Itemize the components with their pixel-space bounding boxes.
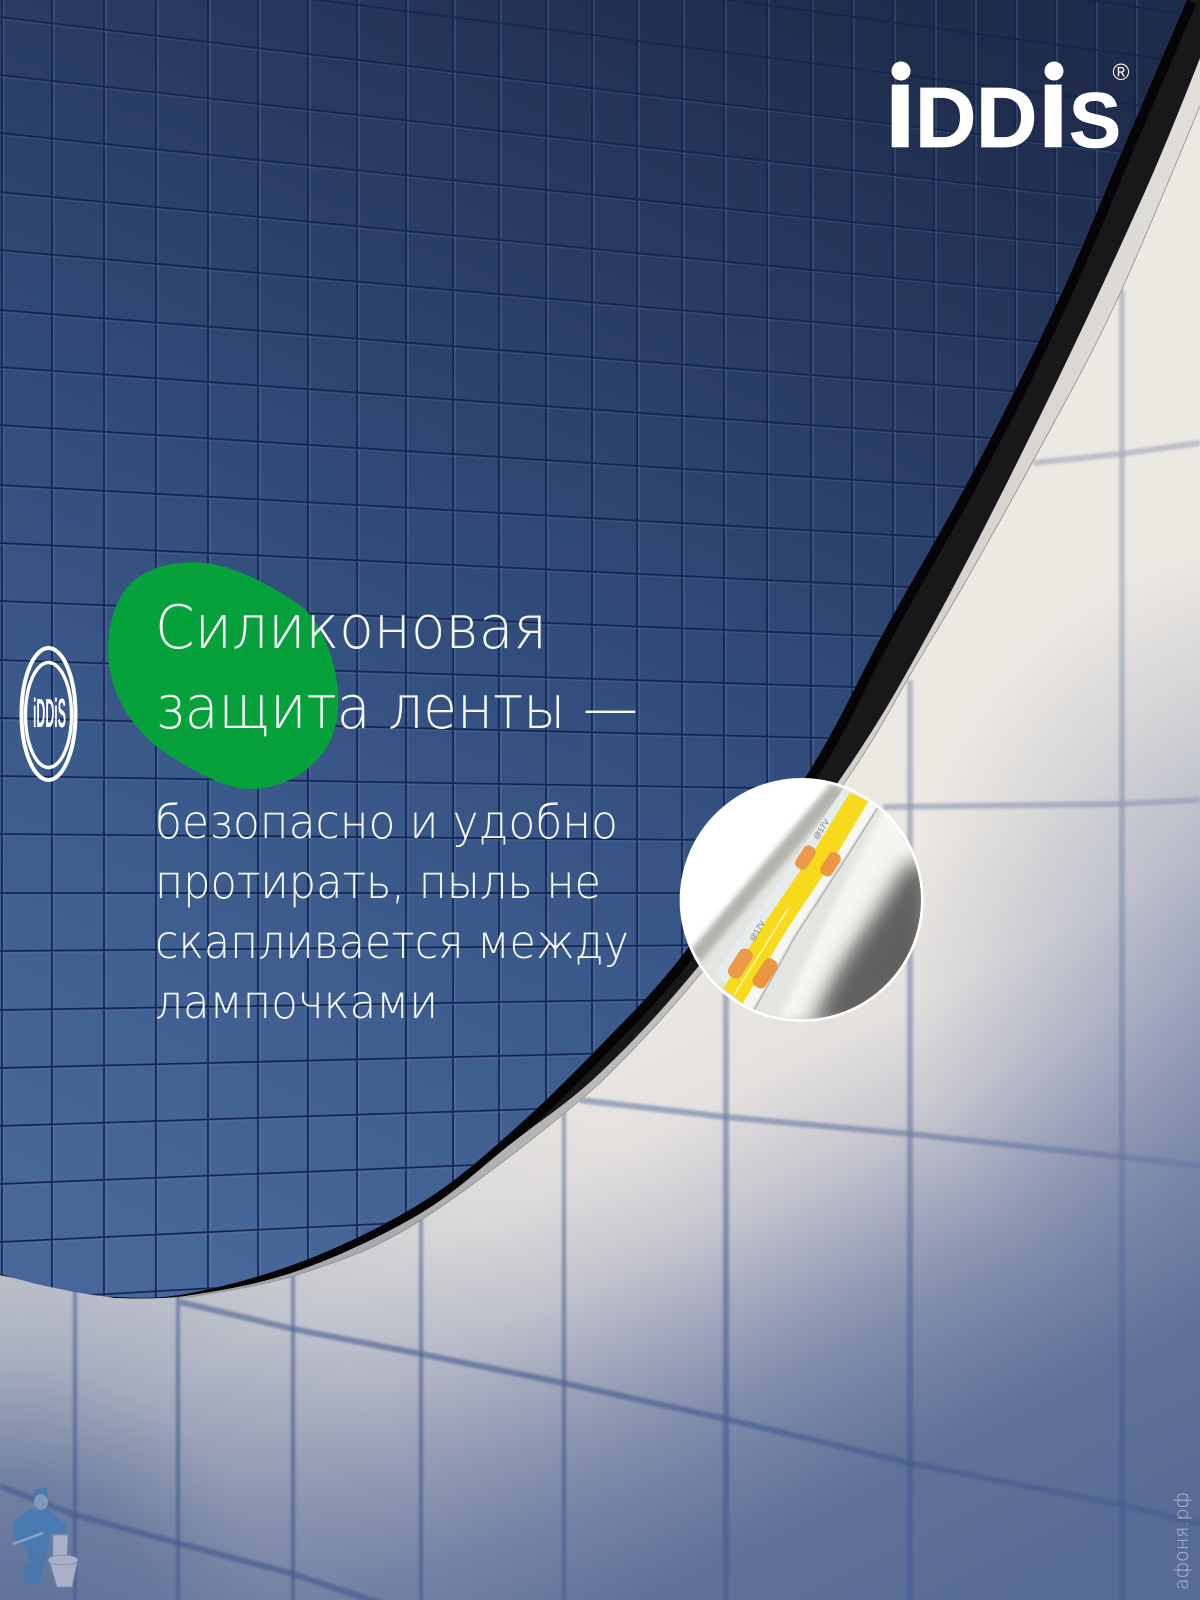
infographic scene: iDDiS — [33, 690, 66, 736]
heading — [155, 593, 638, 743]
body text: безопасно и удобно — [155, 795, 618, 849]
zoom circle: LED strip close-up — [673, 773, 930, 1027]
zoom circle: LED strip close-up: @17V — [747, 919, 768, 943]
zoom circle: LED strip close-up: @17V — [811, 817, 832, 841]
brand logo: D — [915, 71, 976, 166]
body text: лампочками — [155, 975, 438, 1029]
heading: Силиконовая — [155, 593, 547, 663]
brand logo: ® — [1113, 59, 1130, 85]
watermark: афоня.рф — [1171, 1492, 1193, 1590]
body text: протирать, пыль не — [155, 855, 601, 909]
brand logo: i — [1037, 41, 1070, 172]
small round logo mark — [22, 648, 76, 780]
heading: защита ленты — — [155, 673, 638, 743]
brand logo: i — [884, 41, 917, 172]
brand logo: D — [976, 71, 1037, 166]
body text — [155, 795, 629, 1029]
body text: скапливается между — [155, 915, 629, 969]
brand logo: S — [1069, 76, 1121, 164]
brand logo — [892, 62, 1130, 148]
green blob accent — [108, 562, 338, 789]
plumber mascot icon — [13, 1487, 78, 1587]
